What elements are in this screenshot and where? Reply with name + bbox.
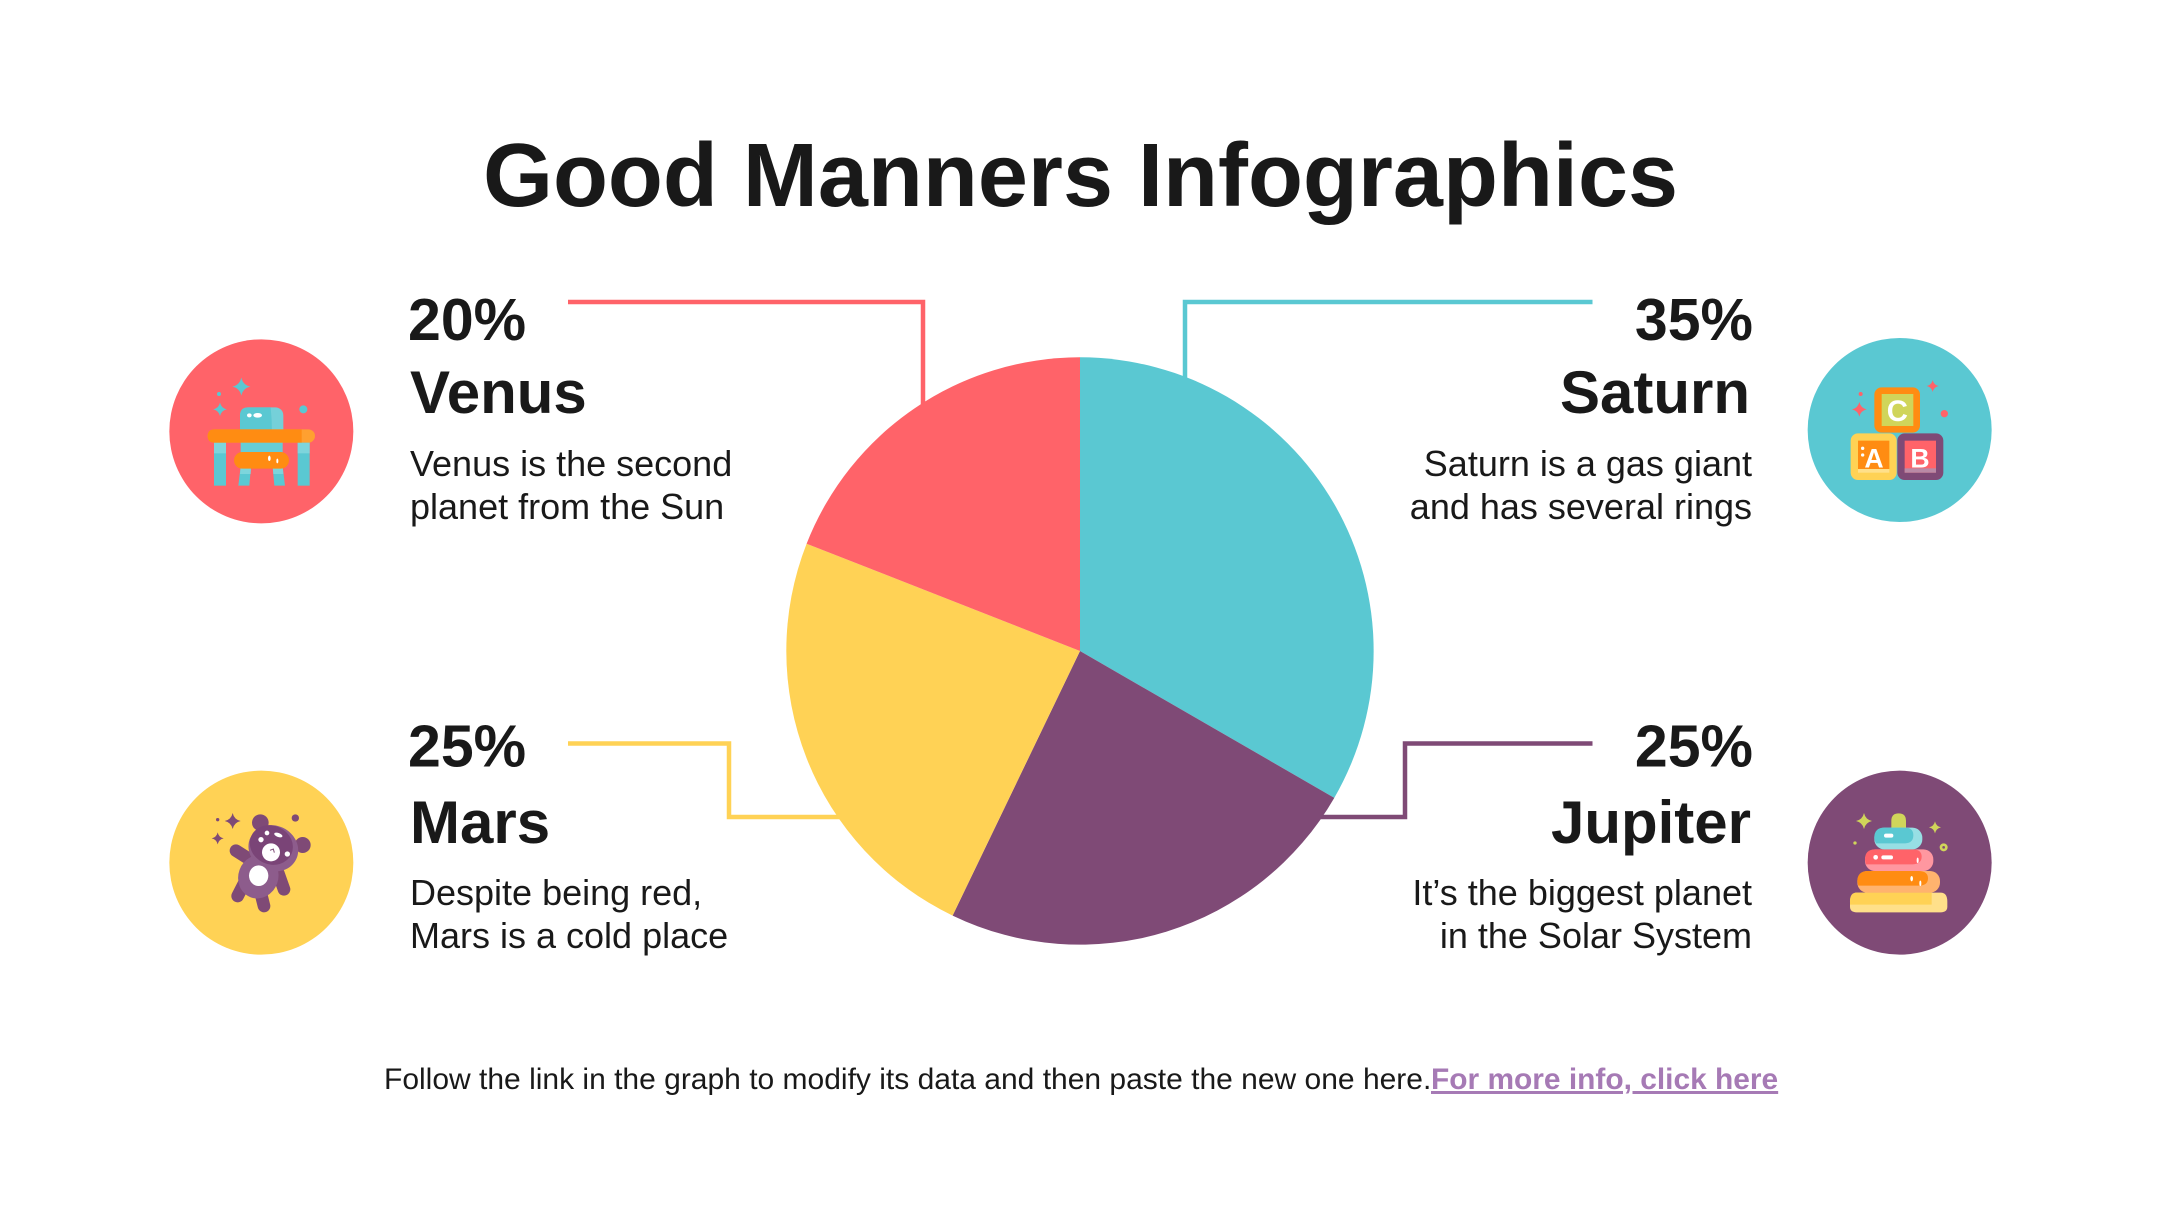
icon: alphabet blocks on teal circle: A — [1864, 444, 1884, 474]
text block: Saturn: and has several rings — [1410, 486, 1752, 527]
connector: Venus — [568, 302, 923, 430]
text block: Venus: 20% — [408, 287, 526, 353]
text block: Jupiter: Jupiter — [1551, 789, 1751, 856]
text block: Jupiter: 25% — [1635, 714, 1753, 780]
slice: Jupiter 25% — [953, 651, 1334, 945]
connector: Saturn — [1185, 302, 1592, 400]
connector: Mars — [568, 744, 860, 817]
text block: Saturn: 35% — [1635, 287, 1753, 353]
text block: Jupiter: in the Solar System — [1440, 915, 1752, 956]
icon: teddy bear on yellow circle — [169, 771, 353, 955]
text block: Venus: Venus — [410, 359, 587, 426]
icon: alphabet blocks on teal circle: B — [1910, 443, 1930, 473]
text block: Saturn: Saturn is a gas giant — [1424, 443, 1752, 484]
footer note with link: For more info, click here — [1431, 1063, 1778, 1096]
title: Good Manners Infographics — [483, 126, 1678, 226]
pie chart — [786, 357, 1374, 945]
text block: Venus — [408, 287, 732, 527]
text block: Mars — [408, 714, 728, 956]
text block: Saturn — [1410, 287, 1753, 527]
text block: Mars: Mars — [410, 789, 550, 856]
connector: Jupiter — [1300, 744, 1592, 817]
text block: Jupiter — [1412, 714, 1753, 956]
text block: Saturn: Saturn — [1560, 359, 1750, 426]
text block: Jupiter: It’s the biggest planet — [1412, 872, 1752, 913]
text block: Mars: Mars is a cold place — [410, 915, 728, 956]
slice: Venus 20% — [807, 357, 1080, 651]
text block: Mars: Despite being red, — [410, 872, 702, 913]
text block: Venus: Venus is the second — [410, 443, 732, 484]
footer note with link: Follow the link in the graph to modify its data and then paste the new one here. — [384, 1063, 1431, 1096]
icon: desk on red circle — [169, 339, 353, 523]
icon: alphabet blocks on teal circle — [1808, 338, 1992, 522]
text block: Venus: planet from the Sun — [410, 486, 724, 527]
icon: alphabet blocks on teal circle: C — [1887, 395, 1908, 428]
slice: Saturn 35% — [1080, 357, 1374, 798]
slice: Mars 25% — [786, 544, 1080, 916]
icon: stacking rings on purple circle — [1808, 771, 1992, 955]
text block: Mars: 25% — [408, 714, 526, 780]
